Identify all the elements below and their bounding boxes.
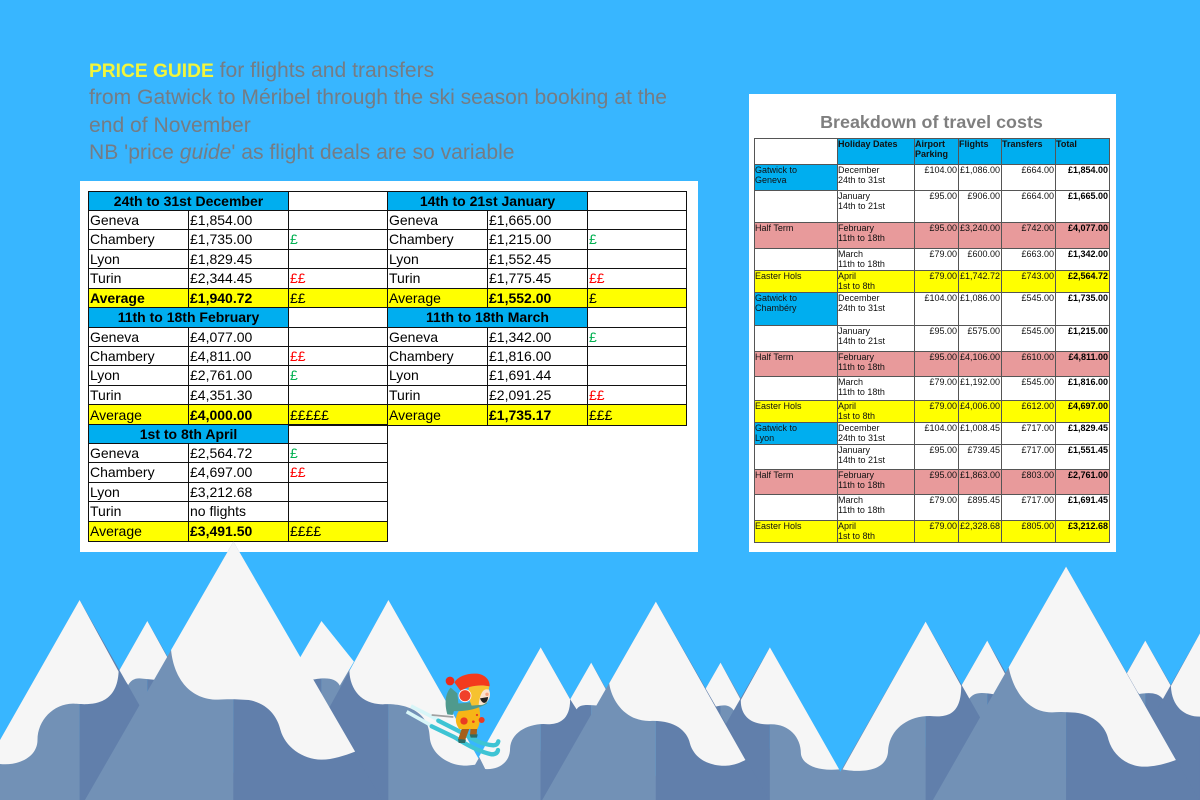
table: travel cost breakdown: 24th to 31st [838, 433, 885, 443]
table: 11th to 18th February [88, 308, 387, 426]
icon: skier [407, 674, 498, 754]
title: price guide heading: NB 'price guide' as flight deals are so variable [89, 141, 514, 164]
mountain range [0, 542, 1200, 800]
table: travel cost breakdown: Lyon [755, 433, 774, 443]
table: travel cost breakdown: £1,665.00 [1068, 191, 1108, 201]
table: 24th to 31st December [88, 191, 387, 307]
table: travel cost breakdown: £1,192.00 [960, 377, 1000, 387]
table: 1st to 8th April: ££ [290, 464, 306, 480]
table: travel cost breakdown: £79.00 [929, 495, 957, 505]
table: travel cost breakdown: £743.00 [1021, 271, 1054, 281]
table: travel cost breakdown: 11th to 18th [838, 233, 885, 243]
table: travel cost breakdown: February [838, 470, 874, 480]
table: travel cost breakdown: 1st to 8th [838, 281, 875, 291]
mountain right of skier [455, 647, 628, 800]
table: 1st to 8th April: £3,491.50 [190, 523, 252, 539]
table: travel cost breakdown: £663.00 [1021, 249, 1054, 259]
mountain right valley [824, 622, 1027, 800]
table: 24th to 31st December: ££ [290, 270, 306, 286]
table: travel cost breakdown: £79.00 [929, 377, 957, 387]
table: 11th to 18th February: Turin [90, 386, 121, 402]
table: travel cost breakdown: 11th to 18th [838, 480, 885, 490]
table: 14th to 21st January: £ [589, 231, 597, 247]
table: travel cost breakdown: Gatwick to [755, 165, 797, 175]
table: travel cost breakdown: £805.00 [1021, 521, 1054, 531]
table: 14th to 21st January: £1,552.45 [489, 250, 551, 266]
table: 11th to 18th March: £ [589, 328, 597, 344]
table: 14th to 21st January: ££ [589, 270, 605, 286]
tallest mountain right [933, 567, 1199, 800]
table: travel cost breakdown: £1,008.45 [960, 423, 1000, 433]
table: travel cost breakdown: £895.45 [967, 495, 1000, 505]
table: travel cost breakdown: £79.00 [929, 401, 957, 411]
table: travel cost breakdown: Gatwick to [755, 293, 797, 303]
table: travel cost breakdown: £1,691.45 [1068, 495, 1108, 505]
table: 11th to 18th March: £1,691.44 [489, 367, 551, 383]
table: 14th to 21st January: £1,215.00 [489, 231, 551, 247]
table: 14th to 21st January: Chambery [389, 231, 454, 247]
table: 11th to 18th March: 11th to 18th March [426, 309, 549, 325]
back mountain 2 [220, 621, 423, 800]
table: travel cost breakdown: £4,811.00 [1068, 352, 1108, 362]
table: 24th to 31st December: £1,829.45 [190, 250, 252, 266]
table: travel cost breakdown: £906.00 [967, 191, 1000, 201]
table: travel cost breakdown: £739.45 [967, 445, 1000, 455]
table: travel cost breakdown: £79.00 [929, 521, 957, 531]
table: 14th to 21st January: Lyon [389, 250, 419, 266]
table: travel cost breakdown: £1,735.00 [1068, 293, 1108, 303]
table: 1st to 8th April: Turin [90, 503, 121, 519]
back mountain 3 [513, 663, 670, 800]
mountain right edge [1106, 633, 1200, 800]
table: 11th to 18th March: £1,735.17 [489, 406, 551, 422]
table: travel cost breakdown: Transfers [1002, 139, 1043, 149]
table: 24th to 31st December: Lyon [90, 250, 120, 266]
table: travel cost breakdown: £600.00 [967, 249, 1000, 259]
table: 1st to 8th April: Lyon [90, 484, 120, 500]
table: travel cost breakdown: £4,077.00 [1068, 223, 1108, 233]
mountain centre right [542, 602, 770, 800]
table: travel cost breakdown: April [838, 271, 856, 281]
table: 11th to 18th February: Geneva [90, 328, 139, 344]
table: 11th to 18th March: Turin [389, 386, 420, 402]
table: travel cost breakdown: £4,006.00 [960, 401, 1000, 411]
table: 24th to 31st December: £1,854.00 [190, 212, 252, 228]
table: travel cost breakdown: £95.00 [929, 326, 957, 336]
table: travel cost breakdown: Geneva [755, 175, 787, 185]
table: travel cost breakdown: £95.00 [929, 445, 957, 455]
title: price guide heading [89, 59, 667, 164]
back mountain 4 [642, 663, 799, 800]
table: travel cost breakdown: £3,212.68 [1068, 521, 1108, 531]
table: travel cost breakdown: April [838, 401, 856, 411]
table: 11th to 18th March: Geneva [389, 328, 438, 344]
table: travel cost breakdown: January [838, 326, 870, 336]
table: 11th to 18th February: £££££ [290, 406, 329, 422]
table: 14th to 21st January: Average [389, 290, 441, 306]
table: travel cost breakdown: £2,761.00 [1068, 470, 1108, 480]
table: 11th to 18th February: Lyon [90, 367, 120, 383]
table: travel cost breakdown: April [838, 521, 856, 531]
panel: price guide tables [80, 181, 698, 552]
table: travel cost breakdown: £1,863.00 [960, 470, 1000, 480]
table: travel cost breakdown: Easter Hols [755, 271, 802, 281]
table: travel cost breakdown: £742.00 [1021, 223, 1054, 233]
table: 1st to 8th April: £2,564.72 [190, 444, 252, 460]
table: travel cost breakdown: Half Term [755, 223, 793, 233]
table: 24th to 31st December: ££ [290, 290, 306, 306]
table: travel cost breakdown: £610.00 [1021, 352, 1054, 362]
table: travel cost breakdown [754, 138, 1110, 543]
table: travel cost breakdown: Holiday Dates [838, 139, 898, 149]
table: 14th to 21st January: £ [589, 290, 597, 306]
table: travel cost breakdown: £1,551.45 [1068, 445, 1108, 455]
title: price guide heading: PRICE GUIDE for flights and transfers [89, 59, 434, 82]
table: travel cost breakdown: Half Term [755, 352, 793, 362]
table: travel cost breakdown: February [838, 223, 874, 233]
table: 24th to 31st December: Chambery [90, 231, 155, 247]
table: 11th to 18th March: £1,342.00 [489, 328, 551, 344]
table: travel cost breakdown: £95.00 [929, 191, 957, 201]
table: travel cost breakdown: December [838, 423, 880, 433]
table: travel cost breakdown: £1,854.00 [1068, 165, 1108, 175]
table: 11th to 18th March: £1,816.00 [489, 348, 551, 364]
table: travel cost breakdown: £3,240.00 [960, 223, 1000, 233]
table: 11th to 18th March: ££ [589, 386, 605, 402]
table: 11th to 18th March: Lyon [389, 367, 419, 383]
table: travel cost breakdown: £1,342.00 [1068, 249, 1108, 259]
table: 24th to 31st December: Turin [90, 270, 121, 286]
table: travel cost breakdown: £79.00 [929, 271, 957, 281]
table: travel cost breakdown: Half Term [755, 470, 793, 480]
table: 1st to 8th April: Chambery [90, 464, 155, 480]
table: travel cost breakdown: 14th to 21st [838, 336, 885, 346]
table: 1st to 8th April: 1st to 8th April [140, 426, 237, 442]
table: travel cost breakdown: £717.00 [1021, 423, 1054, 433]
table: 11th to 18th February: £ [290, 367, 298, 383]
table: 14th to 21st January: £1,552.00 [489, 290, 551, 306]
mountain left of valley [682, 647, 856, 800]
table: travel cost breakdown: £664.00 [1021, 165, 1054, 175]
table: travel cost breakdown: Flights [959, 139, 988, 149]
table: travel cost breakdown: December [838, 293, 880, 303]
table: travel cost breakdown: Total [1056, 139, 1077, 149]
table: 11th to 18th February: £4,000.00 [190, 406, 252, 422]
table: travel cost breakdown: 1st to 8th [838, 411, 875, 421]
tallest mountain left [85, 542, 382, 800]
table: 24th to 31st December: 24th to 31st December [114, 192, 263, 208]
title: price guide heading: from Gatwick to Méribel through the ski season booking at the [89, 86, 667, 109]
mountain by skier [279, 600, 502, 800]
table: travel cost breakdown: £79.00 [929, 249, 957, 259]
table: travel cost breakdown: £95.00 [929, 223, 957, 233]
table: 14th to 21st January: £1,665.00 [489, 212, 551, 228]
table: travel cost breakdown: £104.00 [924, 165, 957, 175]
table: travel cost breakdown: £664.00 [1021, 191, 1054, 201]
table: travel cost breakdown: March [838, 249, 863, 259]
table: 24th to 31st December: £1,735.00 [190, 231, 252, 247]
table: travel cost breakdown: 11th to 18th [838, 387, 885, 397]
table: 24th to 31st December: £ [290, 231, 298, 247]
table: 1st to 8th April: £4,697.00 [190, 464, 252, 480]
table: 1st to 8th April: Geneva [90, 444, 139, 460]
table: travel cost breakdown: Easter Hols [755, 521, 802, 531]
table: 11th to 18th March: £££ [589, 406, 612, 422]
table: travel cost breakdown: £1,816.00 [1068, 377, 1108, 387]
table: travel cost breakdown: 14th to 21st [838, 455, 885, 465]
table: travel cost breakdown: 11th to 18th [838, 505, 885, 515]
table: travel cost breakdown: Airport [915, 139, 945, 149]
table: 11th to 18th February: £4,811.00 [190, 348, 251, 364]
table: 11th to 18th February: Chambery [90, 348, 155, 364]
table: travel cost breakdown: £717.00 [1021, 495, 1054, 505]
table: travel cost breakdown: £1,829.45 [1068, 423, 1108, 433]
panel: breakdown of travel costs [749, 94, 1116, 552]
table: 11th to 18th March: £2,091.25 [489, 386, 551, 402]
table: travel cost breakdown: £2,564.72 [1068, 271, 1108, 281]
table: travel cost breakdown: £2,328.68 [960, 521, 1000, 531]
table: travel cost breakdown: £612.00 [1021, 401, 1054, 411]
table: travel cost breakdown: 11th to 18th [838, 362, 885, 372]
back mountain 1 [46, 621, 249, 800]
table: 1st to 8th April: ££££ [290, 523, 321, 539]
table: 24th to 31st December: Geneva [90, 212, 139, 228]
table: travel cost breakdown: £545.00 [1021, 377, 1054, 387]
table: 14th to 21st January: 14th to 21st January [420, 192, 555, 208]
table: 14th to 21st January: Geneva [389, 212, 438, 228]
table: travel cost breakdown: £545.00 [1021, 293, 1054, 303]
table: 1st to 8th April: £ [290, 444, 298, 460]
table: travel cost breakdown: £104.00 [924, 293, 957, 303]
back mountain 5 [895, 641, 1079, 800]
table: 1st to 8th April [88, 424, 388, 542]
table: travel cost breakdown: January [838, 191, 870, 201]
table: 14th to 21st January: Turin [389, 270, 420, 286]
table: travel cost breakdown: 24th to 31st [838, 175, 885, 185]
title: price guide heading: end of November [89, 114, 251, 137]
table: travel cost breakdown: £95.00 [929, 470, 957, 480]
table: 1st to 8th April: no flights [190, 503, 246, 519]
table: travel cost breakdown: £95.00 [929, 352, 957, 362]
table: travel cost breakdown: £4,106.00 [960, 352, 1000, 362]
table: 1st to 8th April: Average [90, 523, 142, 539]
table: travel cost breakdown: £575.00 [967, 326, 1000, 336]
table: travel cost breakdown: March [838, 495, 863, 505]
table: 24th to 31st December: £2,344.45 [190, 270, 252, 286]
table: 14th to 21st January: £1,775.45 [489, 270, 551, 286]
table: 11th to 18th February: £4,077.00 [190, 328, 252, 344]
table: travel cost breakdown: 24th to 31st [838, 303, 885, 313]
table: travel cost breakdown: £4,697.00 [1068, 401, 1108, 411]
table: travel cost breakdown: 1st to 8th [838, 531, 875, 541]
table: 11th to 18th March: Average [389, 406, 441, 422]
table: travel cost breakdown: £1,742.72 [960, 271, 1000, 281]
mountain left [0, 600, 193, 800]
table: travel cost breakdown: February [838, 352, 874, 362]
table: travel cost breakdown: £1,215.00 [1068, 326, 1108, 336]
table: 11th to 18th February: 11th to 18th February [118, 309, 259, 325]
table: travel cost breakdown: Gatwick to [755, 423, 797, 433]
table: travel cost breakdown: £1,086.00 [960, 293, 1000, 303]
table: travel cost breakdown: £1,086.00 [960, 165, 1000, 175]
table: travel cost breakdown: 14th to 21st [838, 201, 885, 211]
table: 24th to 31st December: Average [90, 290, 145, 306]
table: travel cost breakdown: Parking [915, 149, 948, 159]
table: 14th to 21st January [388, 191, 687, 307]
table: travel cost breakdown: 11th to 18th [838, 259, 885, 269]
table: 11th to 18th February: Average [90, 406, 142, 422]
table: travel cost breakdown: December [838, 165, 880, 175]
table: 24th to 31st December: £1,940.72 [190, 290, 252, 306]
table: 11th to 18th February: £4,351.30 [190, 386, 252, 402]
heading: breakdown of travel costs: Breakdown of travel costs [820, 112, 1043, 132]
table: 11th to 18th February: £2,761.00 [190, 367, 252, 383]
table: travel cost breakdown: £104.00 [924, 423, 957, 433]
table: travel cost breakdown: £717.00 [1021, 445, 1054, 455]
table: 11th to 18th March [388, 308, 687, 426]
table: 11th to 18th February: ££ [290, 348, 306, 364]
table: travel cost breakdown: £545.00 [1021, 326, 1054, 336]
table: travel cost breakdown: Chambéry [755, 303, 797, 313]
table: 1st to 8th April: £3,212.68 [190, 484, 252, 500]
back mountain 6 [1053, 641, 1200, 800]
table: travel cost breakdown: March [838, 377, 863, 387]
table: travel cost breakdown: £803.00 [1021, 470, 1054, 480]
table: travel cost breakdown: Easter Hols [755, 401, 802, 411]
table: 11th to 18th March: Chambery [389, 348, 454, 364]
table: travel cost breakdown: January [838, 445, 870, 455]
